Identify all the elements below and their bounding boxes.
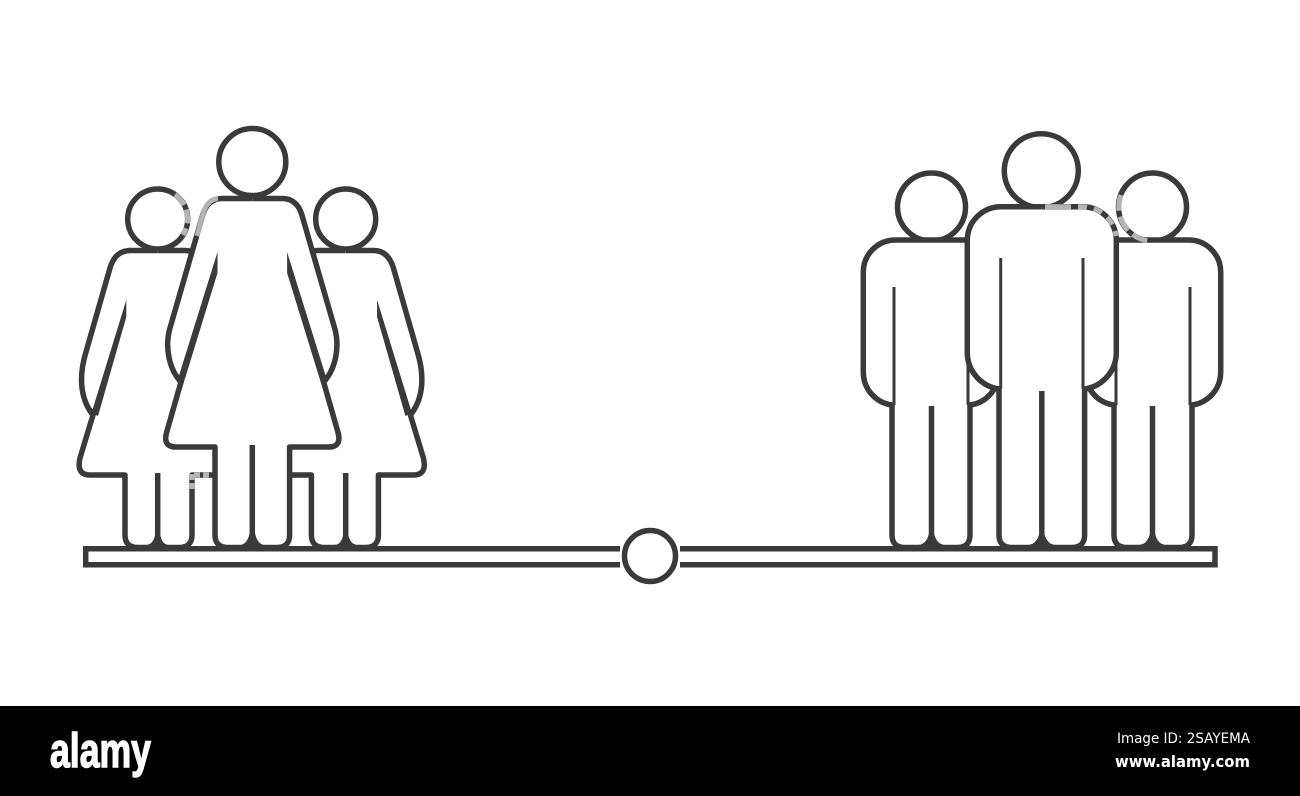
man: left: [863, 173, 999, 548]
watermark tint: men: [1045, 195, 1150, 241]
man: centre: [967, 134, 1116, 547]
footer bar: [0, 706, 1300, 796]
balance beam: [86, 549, 1215, 565]
alamy logo: alamy: [50, 725, 151, 778]
group of three women: [79, 128, 424, 548]
woman: left: [79, 189, 236, 548]
watermark tint: women: [175, 194, 218, 490]
woman: centre: [166, 128, 339, 548]
group of three men: [863, 134, 1221, 547]
woman: right: [268, 189, 424, 548]
website: www.alamy.com: [1115, 752, 1250, 771]
man: right: [1085, 173, 1221, 548]
balance pivot circle: [624, 530, 676, 582]
image id: Image ID: 2SAYEMA: [1117, 731, 1250, 747]
